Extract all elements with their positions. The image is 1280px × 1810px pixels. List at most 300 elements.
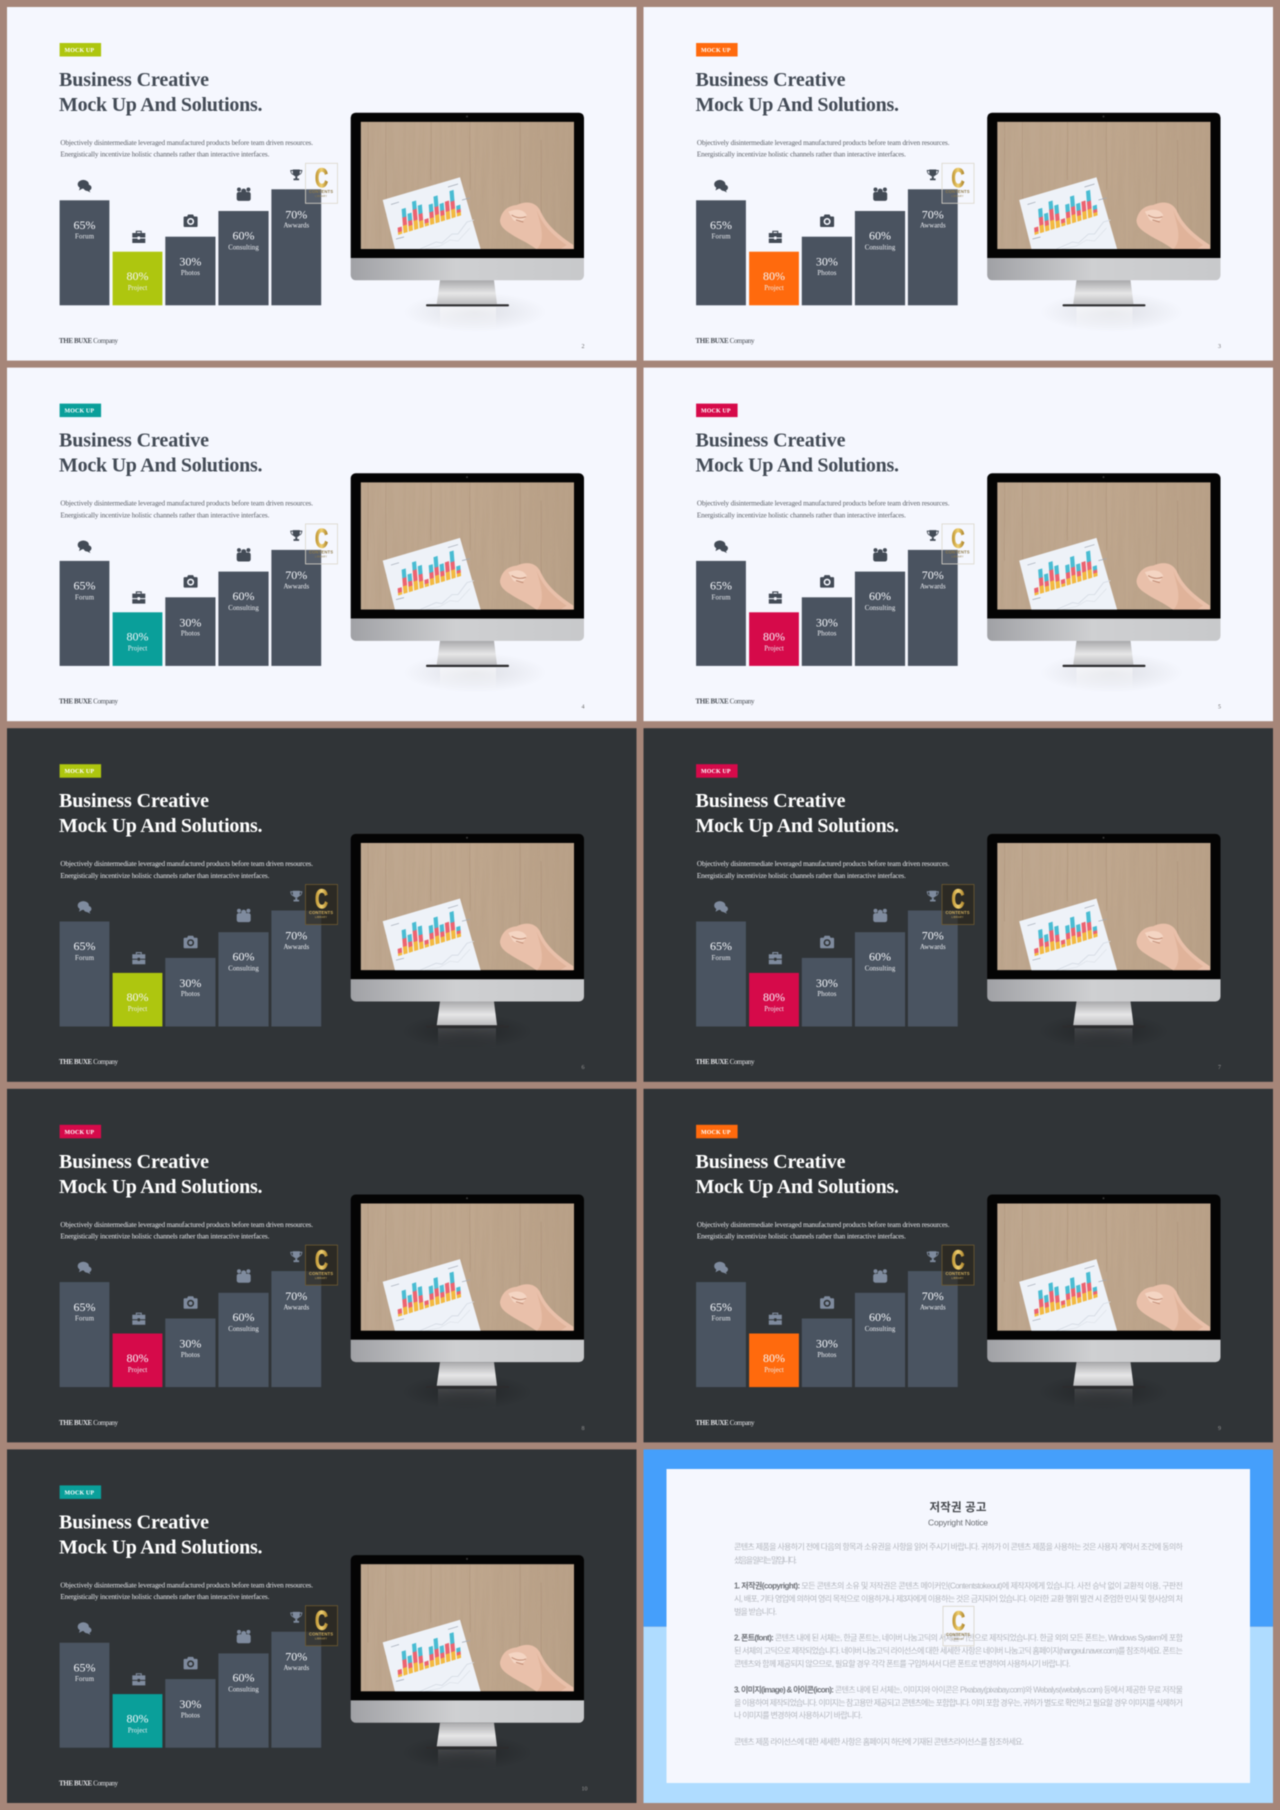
icon: camera: [820, 575, 834, 588]
tag: MOCK UP: [60, 1485, 101, 1499]
bar: Awwards 70%: [271, 189, 321, 305]
notice section 2: font: [734, 1633, 1184, 1668]
bar: Photos 30%: [802, 958, 852, 1026]
bar: Forum 65%: 65%: [710, 218, 732, 232]
notice section 1: copyright: [734, 1581, 1183, 1617]
bar chart: [60, 1251, 321, 1387]
icon: chat bubbles: [78, 1622, 92, 1635]
title: Business Creative: [59, 790, 209, 812]
bar: Forum 65%: Forum: [712, 594, 731, 601]
bar: Consulting 60%: [855, 1293, 905, 1387]
bar: Photos 30%: 30%: [816, 255, 838, 269]
bar chart: [60, 1612, 321, 1748]
icon: briefcase: [769, 231, 782, 243]
title: [59, 790, 262, 837]
description text: Objectively disintermediate leveraged manufactured products before team driven resources.: [60, 860, 313, 868]
title: Mock Up And Solutions.: [696, 815, 899, 837]
footer brand: THE BUXE Company: [59, 1419, 118, 1427]
page number: 7: [1218, 1065, 1221, 1071]
monitor shadow: [401, 1374, 533, 1411]
bar: Consulting 60%: [218, 932, 269, 1026]
notice section 1: copyright: 벌을 받습니다.: [734, 1607, 777, 1617]
bar: Photos 30%: 30%: [816, 1337, 838, 1351]
notice intro: [734, 1542, 1184, 1565]
bar: Consulting 60%: [218, 1653, 269, 1748]
tag: MOCK UP: MOCK UP: [701, 1130, 731, 1136]
description text: Energistically incentivize holistic channels rather than interactive interfaces.: [697, 1233, 906, 1241]
tag: MOCK UP: MOCK UP: [701, 48, 731, 54]
description text: Energistically incentivize holistic channels rather than interactive interfaces.: [697, 872, 906, 880]
bar: Forum 65%: 65%: [710, 939, 732, 953]
bar: Forum 65%: 65%: [710, 1300, 732, 1314]
description text: Objectively disintermediate leveraged manufactured products before team driven resources.: [697, 860, 950, 868]
watermark: C: [952, 163, 964, 193]
bar: Awwards 70%: 70%: [285, 1289, 307, 1303]
tag: MOCK UP: [60, 764, 101, 778]
title: [696, 790, 899, 837]
watermark: C: [315, 884, 328, 914]
tag: MOCK UP: [60, 43, 101, 56]
description text: Objectively disintermediate leveraged manufactured products before team driven resources.: [697, 139, 950, 147]
bar: Forum 65%: [60, 1282, 109, 1387]
footer brand: THE BUXE Company: [696, 1419, 755, 1427]
bar chart: [60, 891, 321, 1026]
bar: Forum 65%: Forum: [75, 594, 95, 601]
watermark: [942, 524, 974, 564]
monitor shadow: [401, 1734, 533, 1771]
icon: camera: [184, 1296, 198, 1309]
notice heading: 저작권 공고: [930, 1500, 987, 1514]
footer brand: THE BUXE Company: [59, 1058, 118, 1066]
bar: Project 80%: 80%: [763, 1351, 785, 1365]
bar: Awwards 70%: [271, 1632, 321, 1748]
watermark: [306, 1245, 338, 1285]
icon: chat bubbles: [714, 540, 728, 553]
icon: briefcase: [132, 591, 145, 604]
watermark: C: [315, 163, 328, 193]
bar: Awwards 70%: [908, 1271, 958, 1387]
bar: Photos 30%: [165, 1679, 216, 1748]
panel: slide 8, dark with crimson accent: [7, 1089, 636, 1442]
description text: Objectively disintermediate leveraged manufactured products before team driven resources.: [60, 1221, 313, 1229]
bar: Forum 65%: Forum: [75, 1676, 95, 1683]
icon: chat bubbles: [714, 1262, 728, 1274]
bar: Consulting 60%: 60%: [869, 589, 891, 603]
bar: Project 80%: 80%: [126, 630, 148, 644]
page number: 3: [1218, 344, 1221, 350]
bar: Project 80%: Project: [128, 1006, 147, 1013]
panel: slide 6, dark with lime accent: [7, 728, 636, 1082]
title: Mock Up And Solutions.: [59, 455, 262, 477]
bar chart: [60, 530, 321, 666]
bar: Forum 65%: 65%: [74, 579, 96, 593]
watermark: C: [315, 1245, 328, 1275]
title: Mock Up And Solutions.: [59, 1176, 262, 1198]
bar: Project 80%: 80%: [763, 990, 785, 1004]
notice heading: [928, 1500, 988, 1528]
icon: people: [873, 548, 887, 562]
page number: 8: [582, 1426, 584, 1432]
tag: MOCK UP: MOCK UP: [64, 1130, 94, 1136]
bar: Awwards 70%: Awwards: [283, 583, 309, 590]
monitor shadow: [1038, 1374, 1170, 1411]
tag: MOCK UP: [696, 764, 738, 778]
bar: Photos 30%: [165, 237, 216, 305]
bar: Project 80%: [113, 1694, 162, 1748]
bar chart: [696, 170, 958, 305]
notice intro: 셨음을 알리는 말입니다.: [734, 1555, 797, 1565]
bar: Forum 65%: Forum: [75, 955, 95, 962]
notice section 2: font: 콘텐츠와 함께 제공되지 않으므로, 필요할 경우 각각 폰트를 구입하셔서 다른 폰트로 변경하여 사용하시기 바랍니다.: [734, 1658, 1071, 1668]
bar: Project 80%: Project: [128, 646, 147, 653]
monitor with photo: [987, 113, 1220, 306]
page number: 6: [582, 1065, 584, 1071]
bar: Photos 30%: [165, 597, 216, 666]
notice section 3: image and icon: 을 이용하여 제작되었습니다. 이미지는 참고용만 제공되고 콘텐츠에는 포함합니다. 이미 포함 경우는, 귀하가 별도로 확인하고 필요할 경우 이미지를 삭제하거: [734, 1697, 1183, 1707]
description text: [60, 1221, 313, 1240]
tag: MOCK UP: MOCK UP: [64, 48, 94, 54]
title: [696, 69, 899, 116]
title: Business Creative: [59, 1151, 209, 1173]
page number: 4: [582, 705, 584, 711]
description text: [697, 500, 950, 519]
monitor with photo: [987, 473, 1220, 667]
watermark: CONTENTS: [309, 550, 333, 555]
bar: Consulting 60%: 60%: [232, 589, 254, 603]
bar: Consulting 60%: [218, 211, 269, 305]
icon: trophy: [290, 170, 302, 180]
icon: trophy: [927, 170, 939, 180]
notice section 2: font: 된 서체의 고딕으로 제작되었습니다. 네이버 나눔고딕 라이선스에 대한 세세한 사항은 네이버 나눔고딕 홈페이지(hangeul.naver.com)를 참조하세요. 폰트는: [734, 1646, 1183, 1656]
bar: Consulting 60%: Consulting: [865, 1326, 896, 1333]
watermark: C: [952, 884, 964, 914]
bar: Photos 30%: Photos: [817, 270, 837, 277]
notice section 3: image and icon: [734, 1684, 1183, 1720]
bar: Project 80%: 80%: [763, 630, 785, 644]
tag: MOCK UP: MOCK UP: [64, 409, 94, 415]
icon: people: [237, 1269, 251, 1283]
bar: Awwards 70%: [271, 550, 321, 666]
bar: Awwards 70%: 70%: [922, 568, 944, 582]
bar chart: [696, 1251, 958, 1387]
bar: Project 80%: 80%: [763, 269, 785, 283]
watermark: [943, 1606, 974, 1646]
bar: Consulting 60%: Consulting: [228, 1687, 259, 1694]
bar: Awwards 70%: 70%: [922, 1289, 944, 1303]
tag: MOCK UP: MOCK UP: [701, 409, 731, 415]
footer brand: THE BUXE Company: [59, 698, 118, 706]
watermark: [942, 884, 974, 924]
title: Business Creative: [59, 69, 209, 91]
bar: Photos 30%: [802, 237, 852, 305]
bar: Photos 30%: 30%: [816, 976, 838, 990]
icon: briefcase: [769, 952, 782, 964]
watermark: LIBRARY: [315, 555, 327, 559]
description text: [697, 860, 950, 880]
icon: people: [237, 1630, 251, 1643]
icon: people: [873, 188, 887, 201]
monitor shadow: [401, 1013, 533, 1050]
watermark: [306, 524, 338, 564]
description text: Objectively disintermediate leveraged manufactured products before team driven resources.: [60, 1581, 313, 1589]
bar: Photos 30%: Photos: [181, 991, 200, 998]
bar: Forum 65%: Forum: [75, 234, 95, 241]
icon: trophy: [290, 1612, 302, 1623]
bar: Consulting 60%: [855, 932, 905, 1026]
watermark: CONTENTS: [309, 1631, 333, 1636]
notice heading: Copyright Notice: [928, 1518, 988, 1528]
bar: Project 80%: 80%: [126, 1351, 148, 1365]
icon: trophy: [927, 1251, 939, 1262]
icon: chat bubbles: [78, 180, 92, 192]
watermark: [942, 1245, 974, 1285]
bar: Project 80%: Project: [764, 646, 784, 653]
bar: Awwards 70%: Awwards: [920, 583, 946, 590]
bar: Forum 65%: 65%: [74, 1300, 96, 1314]
description text: Objectively disintermediate leveraged manufactured products before team driven resources.: [697, 1221, 950, 1229]
bar: Awwards 70%: 70%: [285, 929, 307, 943]
title: Business Creative: [696, 1151, 846, 1173]
bar: Photos 30%: [802, 597, 852, 666]
notice section 3: image and icon: 3. 이미지(image) & 아이콘(icon): 콘텐츠 내에 된 서체는, 이미지와 아이콘은 Pixabay(pixabay.com)와 Webalys(webalys.com) 등에서 제공한 무료 저작물: [734, 1684, 1183, 1694]
bar: Consulting 60%: 60%: [232, 1310, 254, 1324]
watermark: LIBRARY: [315, 915, 327, 919]
bar: Awwards 70%: [271, 1271, 321, 1387]
panel: slide 3, light with orange accent: [644, 7, 1273, 361]
watermark: C: [952, 1245, 964, 1275]
bar: Consulting 60%: 60%: [232, 1671, 254, 1685]
watermark: CONTENTS: [946, 910, 970, 915]
icon: briefcase: [769, 1313, 782, 1325]
watermark: CONTENTS: [309, 910, 333, 915]
footer brand: THE BUXE Company: [696, 1058, 755, 1066]
icon: chat bubbles: [714, 180, 728, 192]
bar: Consulting 60%: 60%: [232, 950, 254, 964]
bar: Photos 30%: [802, 1318, 852, 1387]
title: [59, 69, 262, 116]
title: [59, 1151, 262, 1198]
bar: Project 80%: 80%: [126, 269, 148, 283]
bar: Project 80%: 80%: [126, 990, 148, 1004]
bar: Consulting 60%: Consulting: [865, 244, 896, 251]
description text: [60, 500, 313, 519]
watermark: LIBRARY: [952, 1637, 964, 1641]
monitor shadow: [1040, 292, 1184, 332]
title: [59, 430, 262, 477]
panel: slide 4, light with teal accent: [7, 368, 636, 721]
bar: Project 80%: Project: [128, 285, 147, 292]
bar: Project 80%: Project: [128, 1367, 147, 1374]
monitor with photo: [351, 1555, 584, 1749]
bar: Forum 65%: Forum: [712, 234, 731, 241]
panel: slide 9, dark with orange accent: [644, 1089, 1273, 1442]
title: [59, 1511, 262, 1558]
bar: Forum 65%: [60, 1643, 109, 1748]
bar: Project 80%: [113, 973, 162, 1026]
icon: trophy: [290, 891, 302, 902]
bar: Project 80%: Project: [764, 1367, 784, 1374]
title: [696, 1151, 899, 1198]
title: Mock Up And Solutions.: [59, 815, 262, 837]
description text: Energistically incentivize holistic channels rather than interactive interfaces.: [60, 151, 270, 159]
bar: Consulting 60%: [218, 1293, 269, 1387]
bar: Awwards 70%: 70%: [285, 1650, 307, 1664]
watermark: LIBRARY: [315, 194, 327, 198]
bar: Project 80%: Project: [764, 285, 784, 292]
tag: MOCK UP: MOCK UP: [64, 1490, 94, 1496]
icon: chat bubbles: [78, 540, 92, 553]
bar: Forum 65%: [60, 200, 109, 305]
monitor with photo: [987, 1194, 1220, 1388]
panel: slide 10, dark with teal accent: [7, 1449, 636, 1803]
panel: slide 2, light with lime accent: [7, 7, 636, 361]
watermark: LIBRARY: [952, 915, 964, 919]
tag: MOCK UP: MOCK UP: [701, 769, 731, 775]
watermark: [306, 163, 338, 203]
bar: Project 80%: 80%: [126, 1711, 148, 1725]
bar: Forum 65%: Forum: [712, 955, 731, 962]
title: Mock Up And Solutions.: [696, 94, 899, 116]
bar: Project 80%: [113, 612, 162, 666]
bar: Forum 65%: [696, 200, 746, 305]
description text: Energistically incentivize holistic channels rather than interactive interfaces.: [697, 151, 906, 159]
description text: Objectively disintermediate leveraged manufactured products before team driven resources.: [697, 500, 950, 508]
icon: people: [873, 909, 887, 922]
icon: trophy: [927, 530, 939, 541]
bar: Consulting 60%: Consulting: [865, 605, 896, 612]
bar: Project 80%: [749, 1334, 799, 1387]
tag: MOCK UP: [696, 1125, 738, 1138]
bar: Photos 30%: [165, 1318, 216, 1387]
bar: Consulting 60%: 60%: [869, 228, 891, 242]
icon: briefcase: [132, 952, 145, 964]
bar: Consulting 60%: [855, 572, 905, 666]
bar chart: [696, 530, 958, 666]
bar: Forum 65%: [696, 922, 746, 1026]
description text: Energistically incentivize holistic channels rather than interactive interfaces.: [60, 511, 270, 519]
title: Mock Up And Solutions.: [59, 94, 262, 116]
title: [696, 430, 899, 477]
bar: Photos 30%: Photos: [181, 1352, 200, 1359]
title: Business Creative: [696, 430, 846, 452]
bar: Project 80%: Project: [128, 1727, 147, 1734]
bar: Awwards 70%: Awwards: [920, 1305, 946, 1312]
footer brand: THE BUXE Company: [696, 698, 755, 706]
bar: Photos 30%: 30%: [816, 615, 838, 629]
description text: Objectively disintermediate leveraged manufactured products before team driven resources.: [60, 500, 313, 508]
icon: briefcase: [769, 591, 782, 604]
bar: Project 80%: [749, 973, 799, 1026]
description text: Energistically incentivize holistic channels rather than interactive interfaces.: [60, 1233, 270, 1241]
watermark: CONTENTS: [309, 189, 333, 194]
notice section 3: image and icon: 나 이미지를 변경하여 사용하시기 바랍니다.: [734, 1710, 863, 1720]
bar: Photos 30%: 30%: [179, 255, 201, 269]
icon: camera: [820, 936, 834, 948]
description text: [60, 860, 313, 880]
watermark: LIBRARY: [315, 1636, 327, 1640]
bar: Awwards 70%: Awwards: [283, 223, 309, 230]
bar chart: [696, 891, 958, 1026]
watermark: C: [952, 1606, 965, 1636]
tag: MOCK UP: [60, 404, 101, 417]
bar: Forum 65%: 65%: [74, 1660, 96, 1674]
icon: chat bubbles: [78, 1262, 92, 1274]
monitor shadow: [403, 292, 547, 332]
notice section 1: copyright: 시, 배포, 기타 영업에 의하여 영리 목적으로 이용하거나 제3자에게 이용하는 것은 금지되어 있습니다. 이러한 교환 행위 발견 시 준엄한 민사 및 형사상의 처: [734, 1593, 1183, 1603]
description text: [697, 1221, 950, 1240]
tag: MOCK UP: [60, 1125, 101, 1138]
page number: 10: [582, 1786, 588, 1792]
bar: Photos 30%: Photos: [817, 631, 837, 638]
bar: Forum 65%: 65%: [74, 939, 96, 953]
bar: Project 80%: [113, 1334, 162, 1387]
bar: Consulting 60%: Consulting: [228, 1326, 259, 1333]
bar: Awwards 70%: Awwards: [283, 1305, 309, 1312]
bar: Forum 65%: Forum: [75, 1316, 95, 1323]
icon: camera: [820, 214, 834, 227]
icon: camera: [184, 1657, 198, 1669]
watermark: LIBRARY: [952, 1276, 964, 1280]
monitor with photo: [351, 473, 584, 667]
icon: people: [873, 1269, 887, 1283]
page number: 9: [1218, 1426, 1221, 1432]
bar: Photos 30%: Photos: [817, 1352, 837, 1359]
watermark: C: [315, 524, 328, 554]
title: Business Creative: [59, 430, 209, 452]
tag: MOCK UP: [696, 404, 738, 417]
title: Business Creative: [59, 1511, 209, 1533]
bar: Awwards 70%: [271, 910, 321, 1026]
title: Business Creative: [696, 790, 846, 812]
tag: MOCK UP: [696, 43, 738, 56]
watermark: C: [952, 524, 964, 554]
icon: briefcase: [132, 1313, 145, 1325]
bar: Photos 30%: Photos: [181, 631, 200, 638]
bar: Consulting 60%: 60%: [869, 1310, 891, 1324]
monitor with photo: [351, 1194, 584, 1388]
icon: briefcase: [132, 231, 145, 243]
bar: Photos 30%: 30%: [179, 1697, 201, 1711]
watermark: [306, 884, 338, 924]
description text: [60, 1581, 313, 1601]
bar: Awwards 70%: 70%: [285, 207, 307, 221]
bar: Awwards 70%: 70%: [922, 929, 944, 943]
bar chart: [60, 170, 321, 305]
icon: camera: [184, 214, 198, 227]
footer brand: THE BUXE Company: [59, 337, 118, 345]
monitor shadow: [1038, 1013, 1170, 1050]
description text: Objectively disintermediate leveraged manufactured products before team driven resources.: [60, 139, 313, 147]
icon: chat bubbles: [714, 901, 728, 914]
bar: Consulting 60%: 60%: [869, 950, 891, 964]
bar: Photos 30%: [165, 958, 216, 1026]
notice section 2: font: 2. 폰트(font): 콘텐츠 내에 된 서체는, 한글 폰트는, 네이버 나눔고딕의 서체를 기반으로 제작되었습니다. 한글 외의 모든 폰트는, Windows System에 포함: [734, 1633, 1184, 1643]
watermark: C: [315, 1605, 328, 1635]
watermark: CONTENTS: [946, 1271, 970, 1276]
description text: Energistically incentivize holistic channels rather than interactive interfaces.: [60, 1593, 270, 1601]
icon: people: [237, 909, 251, 922]
icon: briefcase: [132, 1673, 145, 1685]
bar: Consulting 60%: Consulting: [865, 966, 896, 973]
bar: Awwards 70%: Awwards: [920, 944, 946, 951]
watermark: LIBRARY: [315, 1276, 327, 1280]
panel: slide 5, light with crimson accent: [644, 368, 1273, 721]
watermark: CONTENTS: [946, 550, 970, 555]
watermark: CONTENTS: [946, 1632, 970, 1637]
bar: Photos 30%: Photos: [817, 991, 837, 998]
description text: Energistically incentivize holistic channels rather than interactive interfaces.: [60, 872, 270, 880]
icon: trophy: [290, 530, 302, 541]
